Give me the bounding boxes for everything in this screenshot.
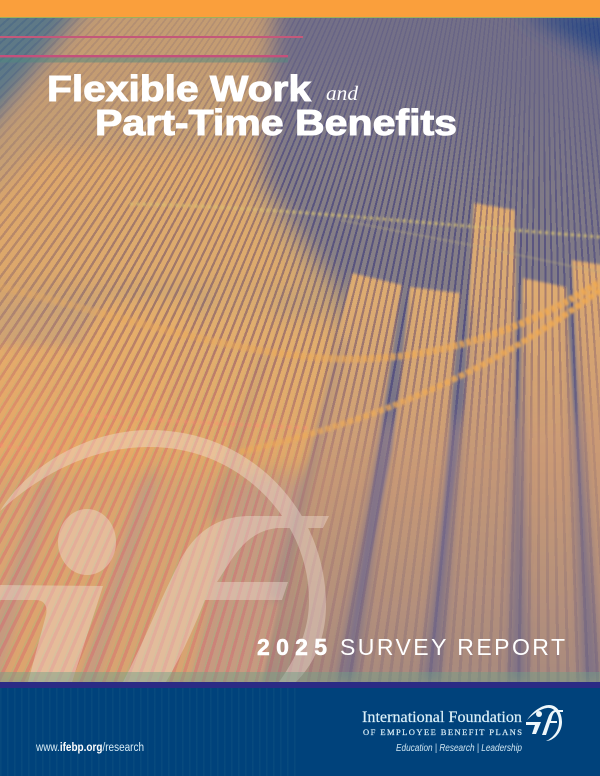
title: Flexible Work (47, 68, 312, 109)
footer band (0, 682, 600, 776)
footer top rule (0, 682, 600, 688)
footer faint stripes (0, 688, 300, 776)
title: and (326, 83, 359, 105)
pink and green stripes overlay (0, 343, 316, 682)
gaps between bars (210, 300, 600, 682)
report label: 2025 (257, 634, 327, 660)
website: www.ifebp.org/research (35, 742, 144, 754)
top orange band (0, 0, 600, 18)
tagline: Education | Research | Leadership (396, 743, 522, 754)
green strip at base of artwork (0, 672, 600, 682)
title (47, 68, 457, 143)
watermark logo (0, 430, 329, 682)
foundation name: International Foundation (362, 709, 522, 726)
foundation name: OF EMPLOYEE BENEFIT PLANS (363, 727, 522, 737)
foundation name (362, 709, 522, 737)
title: Part-Time Benefits (95, 102, 457, 143)
chart bars (0, 285, 278, 682)
small logo (526, 705, 563, 741)
magenta scan lines (0, 36, 303, 62)
orange curves (0, 204, 600, 452)
report label: SURVEY REPORT (340, 634, 565, 660)
